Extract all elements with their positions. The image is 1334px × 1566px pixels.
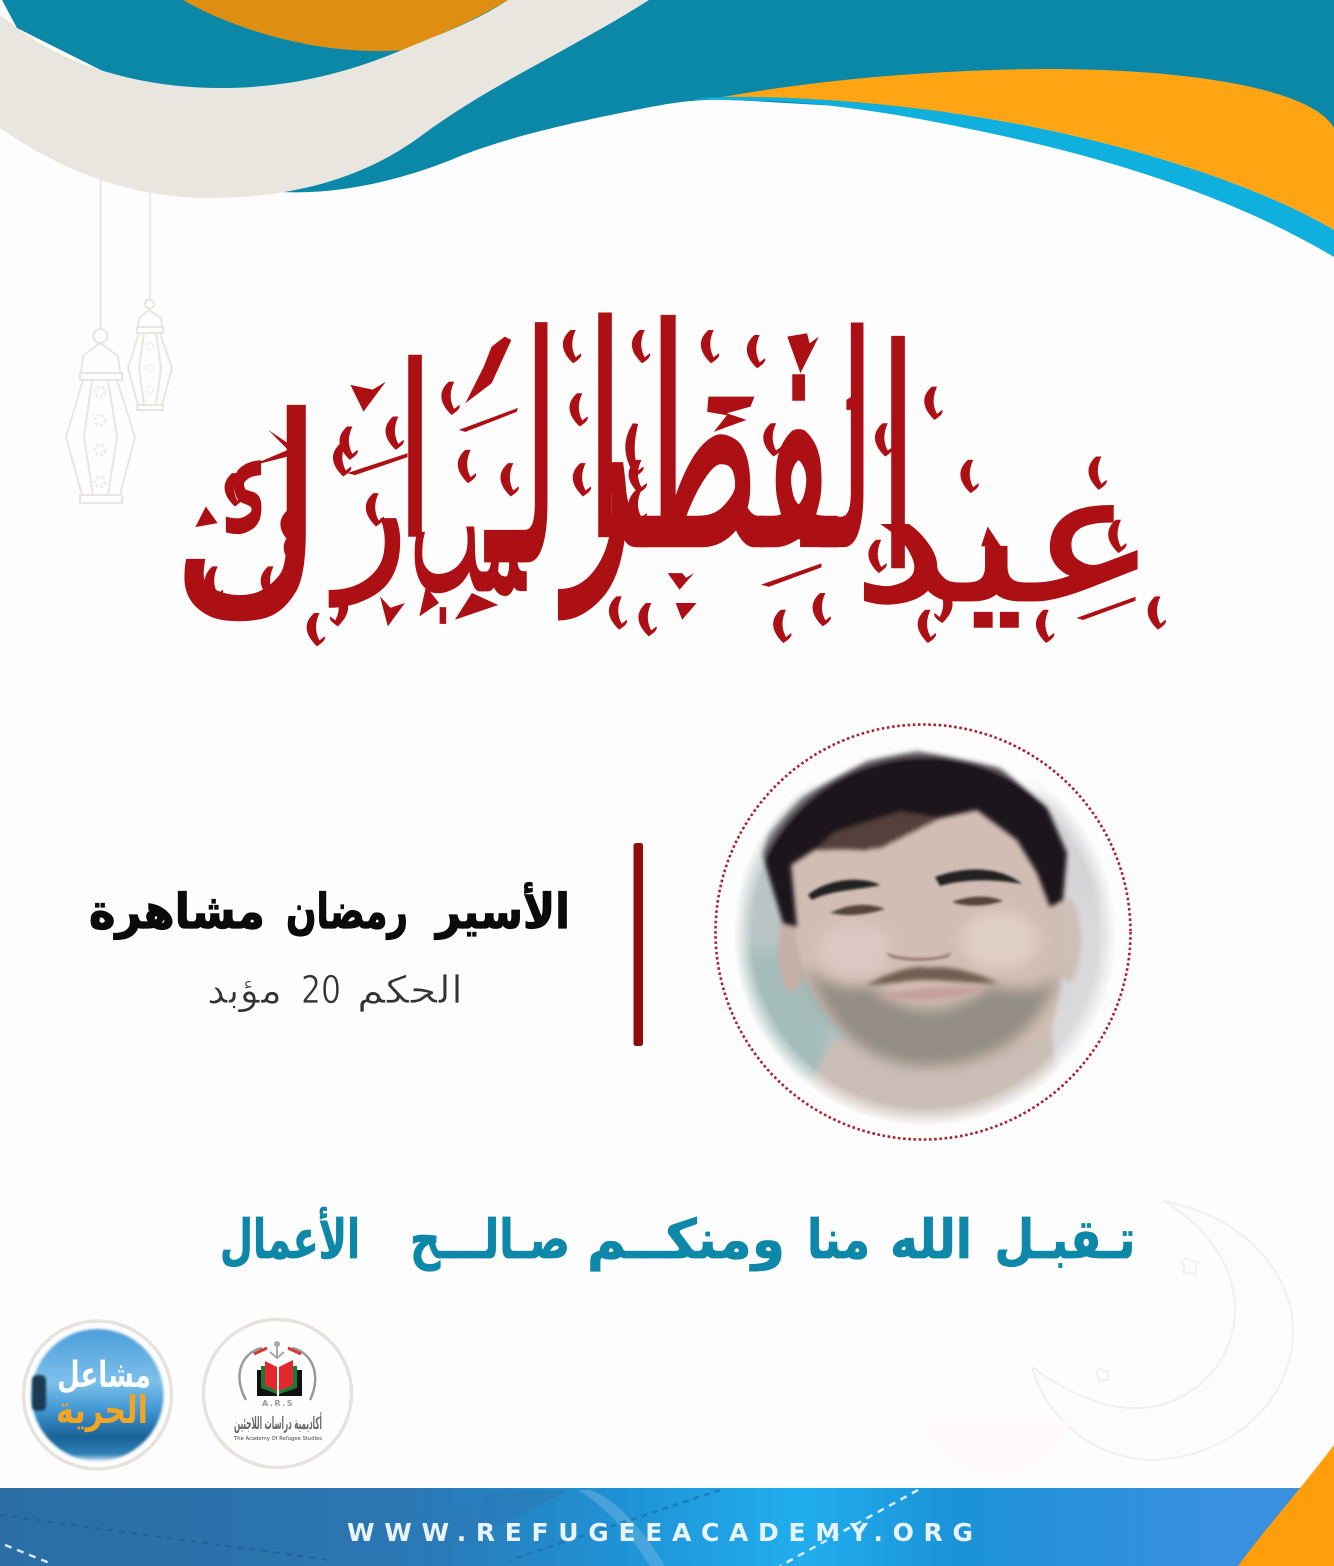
- large lantern: [66, 180, 135, 503]
- title calligraphy: Eid al-Fitr al-Mubarak: ا: [880, 287, 916, 637]
- small lantern: [128, 192, 172, 410]
- title calligraphy: Eid al-Fitr al-Mubarak: ا: [397, 317, 433, 591]
- sentence: 20: [301, 968, 341, 1012]
- nose: [885, 952, 952, 961]
- logo: Mashaael Al-Hurriya: [24, 1321, 172, 1469]
- book emblem: [239, 1341, 315, 1400]
- lips: [880, 987, 985, 1000]
- blessing line: تـقبـل: [994, 1208, 1136, 1271]
- eyebrows: [808, 880, 880, 900]
- face: [790, 808, 1063, 1038]
- title calligraphy: Eid al-Fitr al-Mubarak: لـ: [801, 277, 874, 614]
- prisoner name: [89, 882, 570, 940]
- title calligraphy: Eid al-Fitr al-Mubarak: ‍فطر: [559, 266, 837, 619]
- prisoner name: الأسير: [434, 882, 570, 940]
- sentence: مؤبد: [207, 968, 282, 1013]
- ears: [777, 920, 805, 993]
- icon: hanging lanterns: [66, 180, 172, 503]
- logo: Academy of Refugee Studies: أكاديمية دراسات اللاجئين: [234, 1412, 322, 1434]
- logo: Academy of Refugee Studies: A.R.S: [262, 1399, 294, 1408]
- blessing line: منا: [807, 1208, 870, 1271]
- vertical divider bar: [634, 843, 643, 1046]
- website url: WWW.REFUGEEACADEMY.ORG: [347, 1518, 973, 1547]
- title calligraphy: Eid al-Fitr al-Mubarak: ك: [173, 363, 323, 677]
- prisoner name: رمضان: [286, 884, 408, 940]
- beard shadow: [806, 965, 1060, 1066]
- prisoner name: مشاهرة: [89, 884, 265, 940]
- footer band: [0, 1488, 1334, 1566]
- title calligraphy: Eid al-Fitr al-Mubarak: لـ: [485, 274, 558, 634]
- title calligraphy: Eid al-Fitr al-Mubarak: [173, 265, 1166, 677]
- photo: [736, 748, 1112, 1124]
- blessing line: ومنكــم: [587, 1208, 785, 1271]
- logo: Mashaael Al-Hurriya: الحرية: [56, 1388, 148, 1432]
- hair: [762, 750, 1067, 927]
- title calligraphy: Eid al-Fitr al-Mubarak: ا: [587, 265, 623, 603]
- title calligraphy: Eid al-Fitr al-Mubarak: عيد: [852, 434, 1158, 643]
- ornamental ticks of the calligraphy: [195, 330, 1166, 646]
- blessing line: صـالـــح: [410, 1208, 570, 1271]
- logo: Academy of Refugee Studies: The Academy Of Refugee Studies: [233, 1436, 322, 1442]
- blessing line: [220, 1207, 1136, 1271]
- eyes: [830, 905, 885, 915]
- decorative faint crescent: [1032, 1201, 1293, 1460]
- title calligraphy: Eid al-Fitr al-Mubarak: ‍مب: [410, 414, 527, 635]
- portrait with dotted ring: [716, 724, 1130, 1140]
- top wave header: [0, 0, 1334, 257]
- blessing line: الأعمال: [220, 1207, 360, 1271]
- sentence: الحكم: [357, 968, 463, 1012]
- dotted ring: [716, 724, 1130, 1140]
- moustache: [866, 967, 998, 985]
- logo: Academy of Refugee Studies: [204, 1320, 352, 1468]
- sentence: [207, 968, 463, 1013]
- orange corner: [1238, 1445, 1334, 1566]
- neck and shoulders: [814, 1029, 1056, 1122]
- faint pink half disc: [925, 1422, 1072, 1475]
- blessing line: الله: [890, 1208, 972, 1271]
- logo: Mashaael Al-Hurriya: مشاعل: [57, 1355, 151, 1396]
- title calligraphy: Eid al-Fitr al-Mubarak: ر: [330, 408, 408, 606]
